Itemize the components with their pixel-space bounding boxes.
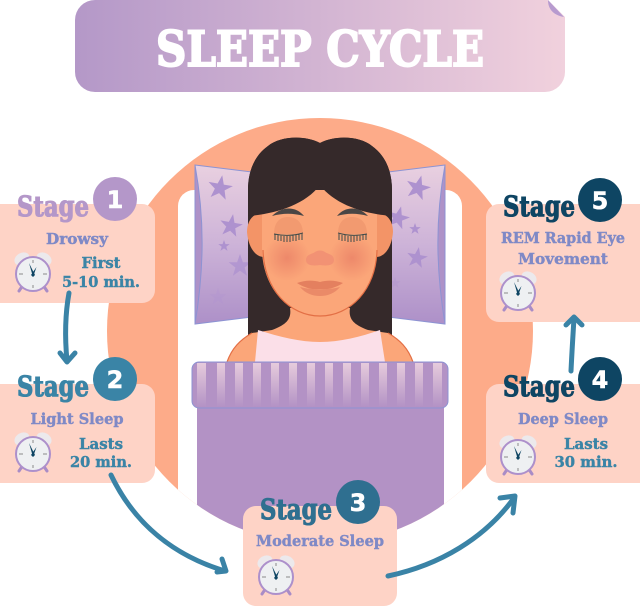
arrow: stage 1 to 2 — [60, 293, 75, 362]
title banner — [75, 0, 565, 92]
ears — [247, 213, 264, 257]
stage 4 clock — [497, 433, 539, 474]
stage 1 duration — [62, 255, 140, 291]
stage 2 duration: Lasts — [79, 436, 123, 453]
panel: stage 4 — [486, 357, 640, 483]
stage 4 duration — [554, 436, 618, 471]
background ring — [107, 118, 533, 550]
stage 3 badge: 3 — [350, 489, 366, 517]
eyelashes — [274, 233, 367, 242]
stage 4 badge: 4 — [592, 366, 608, 394]
stage 5 name: REM Rapid Eye — [501, 230, 625, 247]
stage 5 badge — [578, 178, 622, 222]
pillow — [195, 165, 445, 324]
stage 3 badge — [336, 480, 380, 524]
lips — [297, 281, 343, 289]
stage 4 duration: Lasts — [564, 436, 608, 453]
shoulders and neck — [227, 308, 413, 362]
blanket cuff — [192, 362, 448, 408]
arrow: stage 4 to 5 — [566, 317, 582, 371]
stage 4 name: Deep Sleep — [518, 411, 608, 428]
stage 4 badge — [578, 357, 622, 401]
stage 1 duration: 5-10 min. — [62, 274, 140, 291]
stage 1 badge: 1 — [107, 186, 123, 214]
top — [255, 330, 385, 362]
stage 2 duration — [70, 436, 132, 471]
stage 2 badge: 2 — [107, 366, 123, 394]
hair back — [248, 138, 392, 336]
panel: stage 1 — [0, 177, 155, 303]
stage 4 duration: 30 min. — [554, 454, 618, 471]
arrow: stage 2 to 3 — [111, 475, 226, 572]
stage 2 clock — [12, 430, 54, 471]
panel: stage 5 — [486, 178, 640, 322]
stage 2 duration: 20 min. — [70, 454, 132, 471]
stage 1 name: Drowsy — [46, 231, 109, 248]
stage 3 clock — [255, 553, 297, 594]
hair front — [248, 138, 392, 216]
eyelids — [274, 217, 303, 234]
panel: stage 2 — [0, 357, 155, 483]
stage 2 badge — [93, 357, 137, 401]
arrow: stage 3 to 4 — [388, 496, 515, 576]
title text: SLEEP CYCLE — [156, 20, 484, 78]
stage 5 name — [501, 230, 625, 268]
bed blanket — [192, 362, 448, 530]
stage 3 name: Moderate Sleep — [256, 533, 384, 550]
face — [262, 190, 377, 316]
stage 1 clock — [12, 250, 54, 291]
eyebrows — [272, 208, 304, 216]
stage 2 name: Light Sleep — [30, 411, 124, 428]
stage 4 heading: Stage — [503, 370, 575, 403]
shoulder outline — [227, 333, 413, 362]
stage 2 heading: Stage — [17, 370, 89, 403]
stage 5 name: Movement — [518, 251, 608, 268]
stage 5 clock — [497, 269, 539, 310]
stage 5 badge: 5 — [592, 187, 608, 215]
stage 1 duration: First — [82, 255, 121, 272]
cheeks — [264, 235, 310, 281]
stage 5 heading: Stage — [503, 190, 575, 223]
face outline — [263, 250, 377, 316]
nose — [306, 250, 334, 265]
sleeping woman — [227, 138, 413, 362]
stage 1 heading: Stage — [17, 190, 89, 223]
panel: stage 3 — [243, 480, 397, 606]
stage 1 badge — [93, 177, 137, 221]
stage 3 heading: Stage — [260, 493, 332, 526]
